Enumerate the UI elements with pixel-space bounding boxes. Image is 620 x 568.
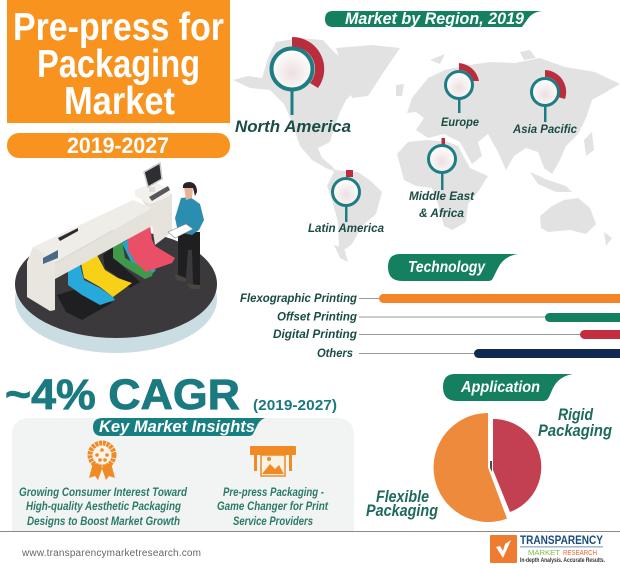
bar: others: Others	[317, 346, 353, 360]
pin: europe	[446, 63, 479, 113]
logo: transparency market research: RESEARCH	[563, 548, 597, 557]
pin: latin america	[332, 170, 360, 222]
logo: transparency market research: TRANSPARENCY	[520, 533, 603, 547]
bar: others	[317, 346, 620, 360]
section header: application: Application	[460, 379, 540, 396]
bar chart: technology	[240, 291, 620, 360]
label: asia pacific: Asia Pacific	[512, 122, 577, 136]
cagr headline	[5, 371, 337, 419]
slice: rigid packaging	[493, 419, 541, 512]
label: latin america: Latin America	[308, 221, 384, 235]
label: flexible packaging: Flexible	[376, 487, 429, 506]
year pill: 2019-2027	[67, 133, 169, 158]
title block: Market	[64, 80, 175, 123]
text: insight one: Growing Consumer Interest Toward	[19, 487, 188, 499]
operator	[168, 182, 204, 289]
pie centre mark	[490, 461, 492, 472]
printed colour sheets	[57, 225, 175, 320]
year pill	[7, 133, 230, 158]
title block	[7, 0, 230, 123]
section header: market by region: Market by Region, 2019	[345, 9, 525, 28]
cagr headline: (2019-2027)	[253, 397, 337, 414]
pin: asia pacific	[532, 70, 566, 122]
label: middle east and africa: Middle East	[409, 189, 475, 203]
title block: Pre-press for	[13, 6, 224, 49]
bar: offset printing	[277, 310, 620, 324]
panel: key market insights	[12, 417, 354, 531]
text: insight two	[217, 487, 329, 528]
label: middle east and africa: & Africa	[419, 206, 464, 220]
bar: flexographic printing: Flexographic Printing	[240, 291, 358, 305]
label: rigid packaging	[538, 405, 613, 440]
section header: technology: Technology	[408, 259, 486, 276]
panel heading: Key Market Insights	[99, 417, 255, 436]
bar: digital printing	[273, 327, 620, 341]
icon: printer with image	[250, 446, 296, 476]
printer body	[27, 163, 172, 311]
pie chart: application	[434, 413, 541, 522]
footer url: www.transparencymarketresearch.com	[21, 548, 201, 559]
bar: digital printing: Digital Printing	[273, 327, 358, 341]
label: north america: North America	[235, 117, 351, 136]
cagr headline: ~4% CAGR	[5, 371, 240, 419]
text: insight one: Designs to Boost Market Growth	[27, 516, 180, 528]
footer rule	[0, 531, 620, 532]
text: insight one	[19, 487, 188, 528]
text: insight two: Pre-press Packaging -	[223, 487, 324, 499]
platform	[15, 230, 217, 353]
label: europe: Europe	[441, 115, 479, 129]
slice: flexible packaging	[434, 413, 507, 522]
icon: award medal	[89, 443, 115, 480]
text: insight two: Game Changer for Print	[217, 501, 329, 513]
text: insight one: High-quality Aesthetic Packaging	[26, 501, 181, 513]
pin: middle east and africa	[428, 138, 456, 190]
title block: Packaging	[37, 43, 200, 86]
label: middle east and africa	[409, 189, 475, 220]
pin: north america	[272, 37, 324, 115]
illustration: printer and operator	[15, 163, 217, 353]
section header: application	[443, 374, 573, 401]
label: flexible packaging: Packaging	[366, 501, 439, 520]
logo: transparency market research: MARKET	[528, 548, 560, 557]
bar: flexographic printing	[240, 291, 620, 305]
section header: technology	[388, 254, 518, 281]
label: flexible packaging	[366, 487, 439, 520]
world map	[233, 38, 620, 262]
bar: offset printing: Offset Printing	[277, 310, 358, 324]
logo: transparency market research	[490, 533, 605, 564]
label: rigid packaging: Rigid	[558, 405, 594, 424]
text: insight two: Service Providers	[233, 516, 313, 528]
